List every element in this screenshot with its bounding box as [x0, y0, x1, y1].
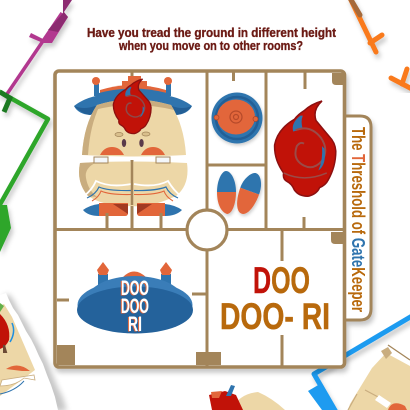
side tab label: The Threshold of GateKeeper — [348, 127, 368, 312]
title — [87, 26, 337, 53]
decoration: orange sprue right — [391, 69, 410, 89]
plastic model frame — [55, 71, 371, 367]
side tab — [344, 116, 371, 320]
belly stitches — [84, 181, 181, 201]
flame on head — [113, 79, 151, 134]
logo text: DOO — [120, 296, 148, 318]
decoration: bottom flame piece — [209, 385, 285, 410]
logo text: DOO — [121, 277, 149, 300]
head — [82, 100, 186, 156]
title: when you move on to other rooms? — [118, 39, 303, 53]
tan body piece — [348, 353, 410, 410]
part: shoes — [217, 170, 266, 217]
logo text: DOO — [120, 278, 148, 300]
eyes — [122, 139, 144, 147]
right shoe — [232, 170, 266, 217]
part: flame — [275, 101, 336, 196]
frame stubs over feet — [107, 213, 161, 229]
lower body — [79, 162, 188, 206]
logo text: RI — [128, 313, 142, 336]
logo text: RI — [127, 314, 141, 336]
outer frame — [55, 71, 344, 367]
decoration: left stamp piece — [0, 293, 67, 410]
centre seam — [131, 160, 133, 205]
frame dividers — [56, 72, 343, 366]
decoration: blue frame with piece — [308, 316, 410, 410]
cheeks — [100, 147, 165, 155]
blue wedge — [308, 384, 335, 410]
part: hat top view with logo — [77, 262, 193, 336]
big text: DOO DOO-RI: DOO- RI — [220, 296, 330, 337]
blue dome — [87, 276, 183, 324]
junction circle — [187, 210, 227, 250]
towers — [97, 262, 172, 292]
decoration: purple sprue — [7, 0, 72, 94]
decoration: orange sprue top — [350, 0, 382, 52]
corner fills — [57, 73, 343, 365]
big text: DOO DOO-RI — [220, 260, 330, 337]
blue frame — [314, 316, 410, 410]
part: dish — [212, 92, 262, 144]
title: Have you tread the ground in different height — [87, 26, 337, 40]
big text: DOO DOO-RI: DOO — [253, 260, 310, 301]
feet — [83, 203, 182, 216]
decoration: green frame — [0, 91, 48, 252]
white teeth — [94, 157, 170, 163]
hat — [74, 76, 192, 115]
eyebrows — [115, 132, 150, 136]
logo text: DOO — [121, 295, 149, 318]
logo text — [120, 277, 149, 336]
part: character figure — [74, 76, 192, 229]
left shoe — [217, 171, 236, 214]
